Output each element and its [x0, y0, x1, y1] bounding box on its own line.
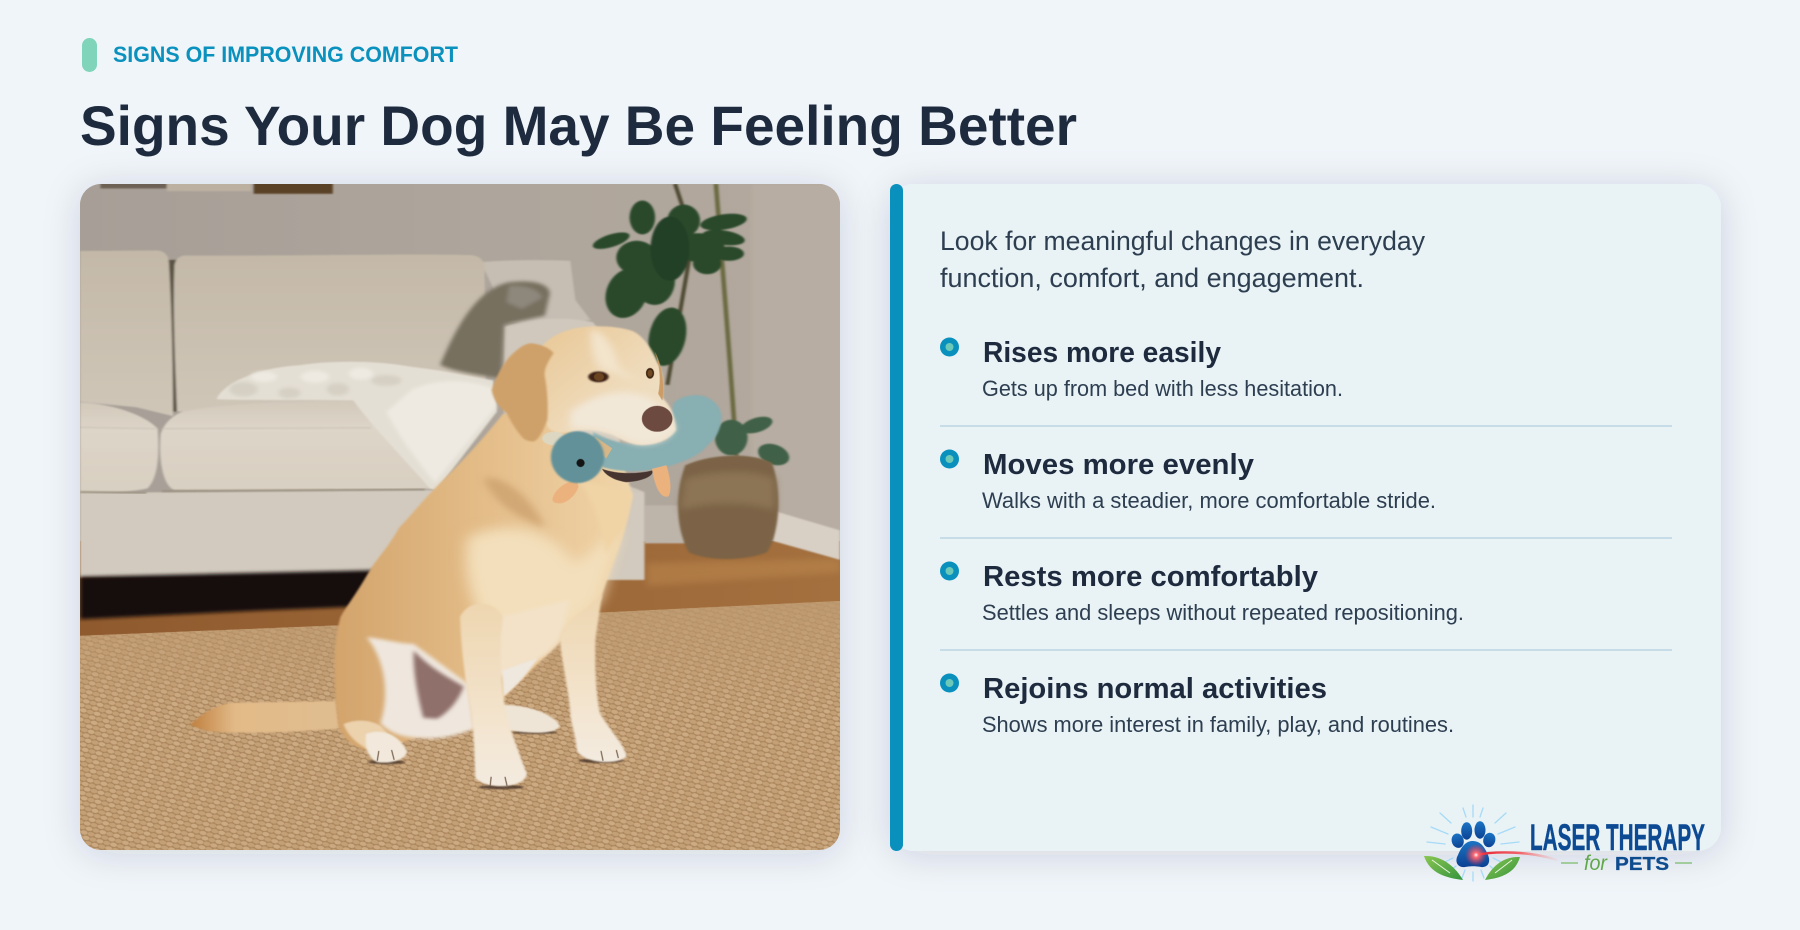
- paw claws: [377, 750, 618, 786]
- plush toy body: [591, 395, 722, 471]
- dog far eye: [646, 368, 654, 379]
- intro text: function, comfort, and engagement.: [940, 263, 1364, 293]
- panel accent bar: [890, 184, 903, 851]
- bullet icon: [940, 450, 959, 468]
- dog mouth: [602, 469, 653, 482]
- toy band: [594, 437, 612, 459]
- woven pot: [678, 456, 778, 559]
- dividers: [940, 426, 1672, 650]
- logo laser beam: [1476, 852, 1557, 860]
- back paw far: [499, 705, 560, 733]
- picture frame: [100, 182, 333, 194]
- rug: [80, 601, 840, 854]
- dog forehead highlight: [591, 329, 637, 380]
- logo: laser therapy for pets: [1424, 805, 1705, 881]
- shadow under sofa: [80, 570, 381, 619]
- item heading: Moves more evenly: [983, 449, 1254, 481]
- logo tagline: for: [1584, 852, 1608, 875]
- item: rises more easily: [940, 337, 1343, 401]
- bullet icon: [940, 338, 959, 356]
- logo tagline: PETS: [1615, 854, 1669, 874]
- dog: [190, 326, 722, 789]
- item: rests more comfortably: [940, 561, 1464, 625]
- item heading: Rises more easily: [983, 337, 1221, 369]
- dog head: [536, 326, 676, 445]
- rear leg: [344, 721, 392, 751]
- dog neck fold: [605, 536, 613, 550]
- gray pillow: [440, 281, 550, 378]
- intro text: Look for meaningful changes in everyday: [940, 226, 1426, 256]
- sofa gap: [164, 260, 180, 412]
- photo wall: [80, 184, 840, 505]
- left front leg: [460, 604, 527, 786]
- panel background: [890, 184, 1721, 851]
- item: moves more evenly: [940, 449, 1436, 513]
- hind white patch: [367, 637, 474, 739]
- toy wing tip: [542, 432, 566, 445]
- item: rejoins normal activities: [940, 673, 1454, 737]
- dog ear: [492, 343, 553, 442]
- logo tagline: [1561, 852, 1692, 875]
- logo sunburst rays: [1427, 805, 1519, 881]
- dog far ear: [655, 351, 663, 400]
- right front leg: [560, 595, 627, 762]
- toy head: [551, 431, 604, 483]
- paw shadows: [368, 730, 623, 789]
- white throw blanket: [217, 362, 497, 490]
- panel: signs of improvement: [890, 184, 1721, 851]
- logo paw: [1450, 821, 1497, 867]
- photo shadow: [80, 184, 840, 850]
- logo leaves: [1424, 856, 1520, 880]
- dog muzzle: [570, 392, 675, 444]
- plush duck toy: [542, 431, 670, 503]
- seat underline: [80, 489, 425, 493]
- eyebrow label: [82, 38, 459, 72]
- toy feet: [552, 465, 670, 503]
- sofa middle back cushion: [174, 255, 486, 412]
- intro text: [940, 226, 1426, 293]
- bullet icon: [940, 562, 959, 580]
- dog belly: [500, 602, 568, 676]
- white pillow behind: [481, 260, 591, 322]
- eyebrow text: SIGNS OF IMPROVING COMFORT: [113, 42, 459, 67]
- item description: Shows more interest in family, play, and routines.: [982, 712, 1454, 737]
- bullet icon: [940, 674, 959, 692]
- logo laser glow: [1465, 844, 1487, 866]
- rear paw: [366, 732, 407, 763]
- dark belly: [413, 650, 464, 719]
- lower belly white: [502, 658, 538, 696]
- item description: Gets up from bed with less hesitation.: [982, 376, 1343, 401]
- floor: [80, 541, 840, 644]
- item heading: Rejoins normal activities: [983, 673, 1327, 705]
- dog body: [335, 414, 633, 751]
- eyebrow accent pill: [82, 38, 97, 72]
- dog tail: [190, 701, 339, 733]
- item description: Settles and sleeps without repeated repositioning.: [982, 600, 1464, 625]
- sofa seat cushions: [80, 402, 158, 493]
- item description: Walks with a steadier, more comfortable stride.: [982, 488, 1436, 513]
- toy eye: [576, 459, 585, 467]
- sofa base: [80, 490, 434, 578]
- dog nose: [642, 406, 672, 432]
- title: Signs Your Dog May Be Feeling Better: [80, 94, 1077, 157]
- sofa left back cushion: [80, 251, 173, 416]
- dog neck fur shading: [483, 478, 545, 528]
- seat stitching: [80, 427, 371, 429]
- plant: [590, 184, 793, 469]
- dog eye: [588, 371, 609, 382]
- panel: photo of dog holding toy on rug: [80, 182, 843, 854]
- item heading: Rests more comfortably: [983, 561, 1318, 593]
- baseboard: [774, 511, 840, 560]
- sofa arm: [504, 318, 644, 580]
- dog chest highlight: [466, 528, 621, 671]
- sofa: [80, 251, 644, 580]
